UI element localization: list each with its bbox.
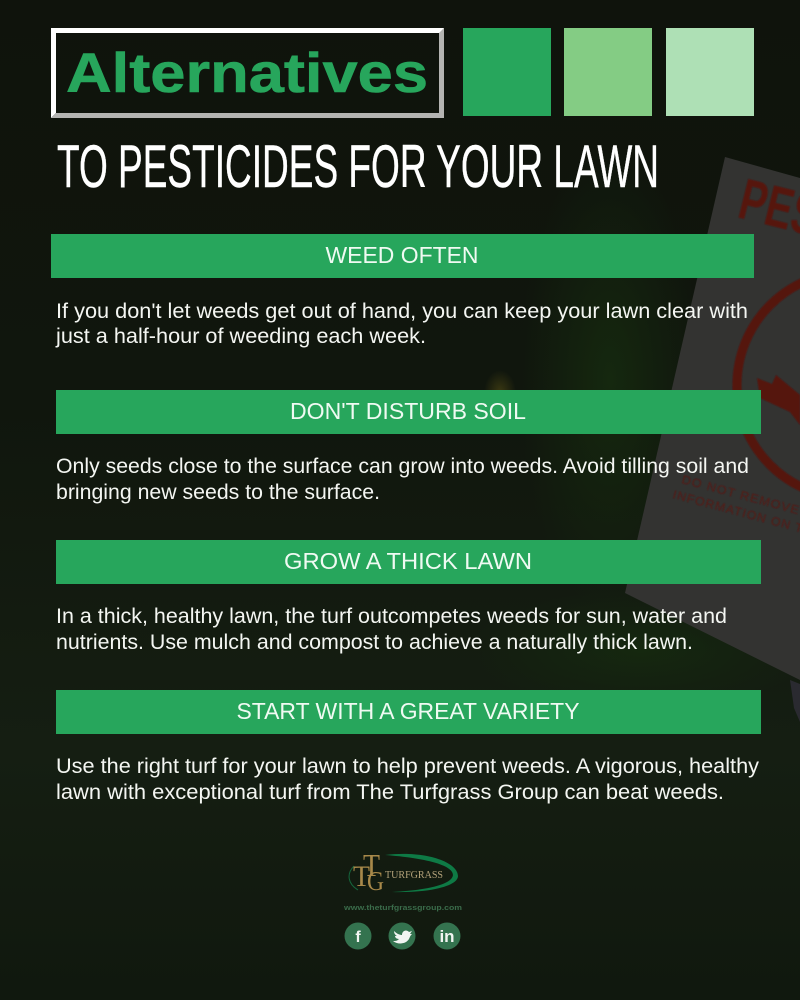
background: pesticide warning sign: DO NOT REMOVE [680, 472, 800, 517]
panel: weed often: WEED OFTEN [326, 242, 478, 268]
panel: start with a great variety: Use the right turf for your lawn to help prevent weeds. A vigorous, healthy [56, 755, 760, 778]
panel: grow a thick lawn: GROW A THICK LAWN [284, 548, 532, 574]
icon: facebook: f [355, 929, 361, 946]
panel: weed often: just a half-hour of weeding each week. [55, 325, 426, 348]
icon: twitter [388, 922, 416, 950]
panel: don't disturb soil [56, 390, 761, 504]
logo: The Turfgrass Group: G [367, 866, 384, 896]
background: pesticide warning sign: INFORMATION ON T [671, 487, 800, 536]
icon: facebook [344, 922, 372, 950]
heading box: Alternatives [51, 28, 444, 118]
panel: don't disturb soil: Only seeds close to the surface can grow into weeds. Avoid tilling soil and [56, 455, 749, 478]
website address: www.theturfgrassgroup.com [343, 903, 462, 912]
icon: linkedin [434, 922, 460, 950]
panel: weed often: If you don't let weeds get out of hand, you can keep your lawn clear with [56, 300, 748, 323]
panel: grow a thick lawn: In a thick, healthy lawn, the turf outcompetes weeds for sun, water and [56, 605, 727, 628]
logo: The Turfgrass Group [349, 847, 458, 896]
panel: start with a great variety: START WITH A GREAT VARIETY [236, 698, 580, 724]
panel: don't disturb soil: bringing new seeds to the surface. [56, 481, 380, 504]
logo: The Turfgrass Group: TURFGRASS [385, 869, 443, 881]
panel: start with a great variety [56, 690, 761, 804]
heading: Alternatives: Alternatives [66, 41, 428, 104]
panel: start with a great variety: lawn with exceptional turf from The Turfgrass Group can beat weeds. [56, 781, 724, 804]
panel: weed often [51, 234, 754, 348]
panel: grow a thick lawn [56, 540, 761, 654]
logo: The Turfgrass Group: T [363, 847, 380, 883]
colour swatches [463, 28, 754, 116]
panel: grow a thick lawn: nutrients. Use mulch and compost to achieve a naturally thick lawn. [56, 631, 693, 654]
logo: The Turfgrass Group: T [353, 860, 370, 893]
background: pesticide warning sign [625, 157, 800, 722]
panel: don't disturb soil: DON'T DISTURB SOIL [290, 398, 526, 424]
icon: linkedin: in [439, 927, 455, 946]
